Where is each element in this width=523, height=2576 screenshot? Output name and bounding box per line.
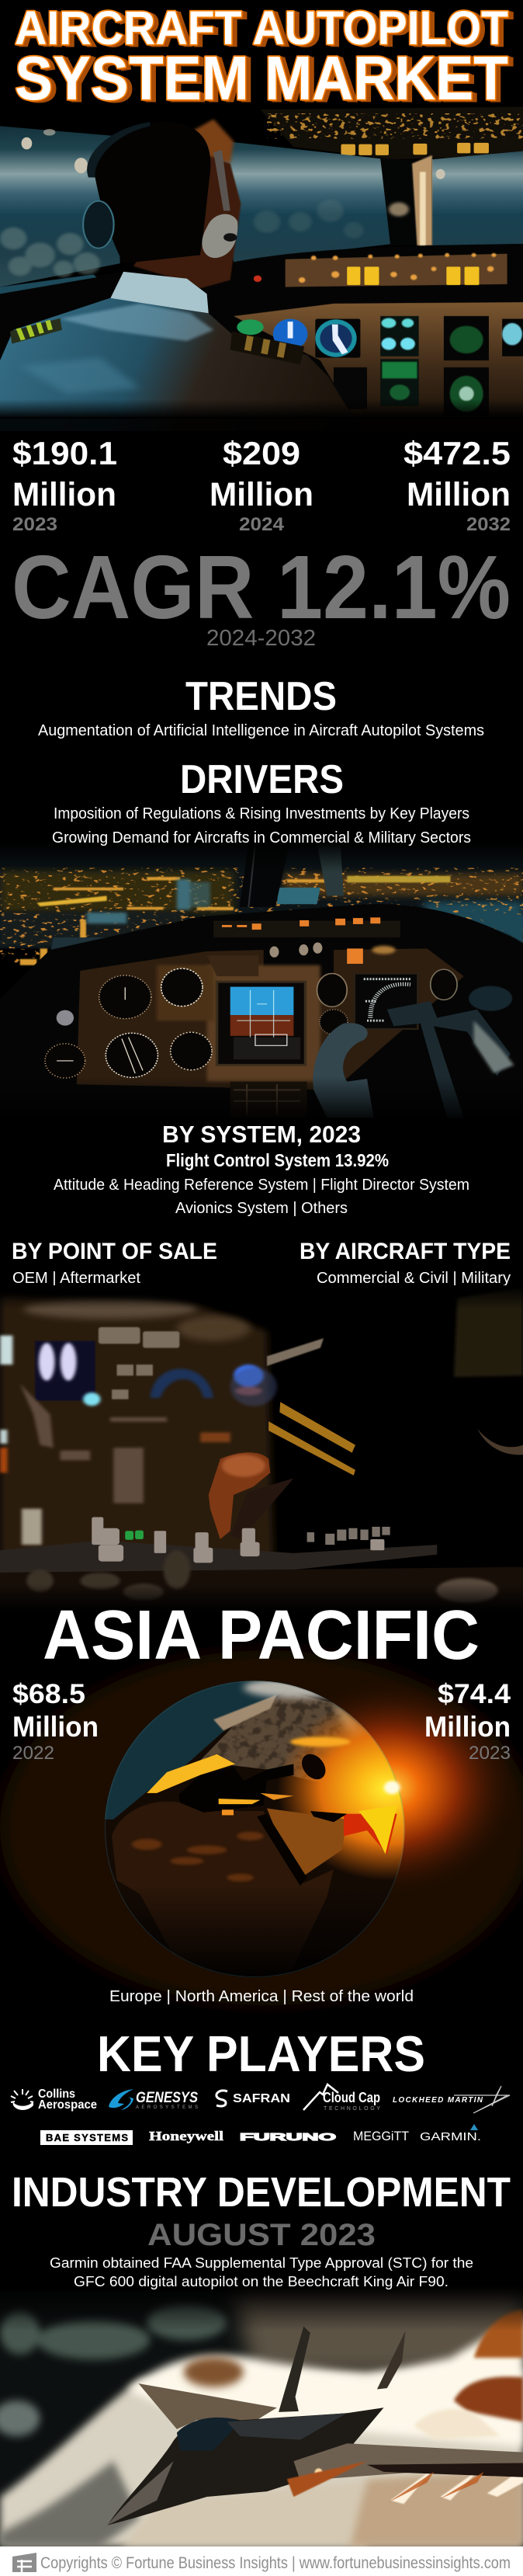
logo: Cloud Cap Technology <box>303 2084 380 2112</box>
windshield <box>0 126 523 287</box>
bottom control panel with knobs <box>0 1517 523 1611</box>
globe with glow <box>0 1650 523 2005</box>
stat: 2024 market size <box>210 435 313 535</box>
blurred cockpit background <box>0 1291 523 1552</box>
sunlight on the limb <box>279 1709 405 1879</box>
stat: 2022 regional size <box>12 1679 99 1764</box>
stat: 2032 market size: 2032 <box>466 514 511 535</box>
Europe and Mediterranean <box>147 1751 347 1886</box>
development text: Garmin obtained FAA Supplemental Type Approval (STC) for the <box>50 2255 473 2271</box>
trends heading: TRENDS <box>185 674 337 719</box>
leading segment: Flight Control System 13.92% <box>166 1150 389 1170</box>
ocean and landmass <box>100 1677 397 1820</box>
control yokes <box>230 986 514 1118</box>
by system section <box>54 1121 469 1217</box>
logo: Genesys Aerosystems: AEROSYSTEMS <box>136 2105 198 2110</box>
drivers text <box>52 805 471 846</box>
logo: Safran: SAFRAN <box>233 2092 290 2105</box>
photo: fighter jet <box>0 2285 523 2546</box>
development text <box>50 2255 473 2289</box>
stat: 2023 market size: Million <box>12 476 116 513</box>
photo: pilot in cockpit <box>0 106 523 435</box>
footer bar <box>0 2546 523 2576</box>
central flight display <box>217 982 305 1065</box>
logo: Genesys Aerosystems: GENESYS <box>136 2090 198 2106</box>
overhead panel <box>260 106 523 159</box>
logo: Garmin <box>420 2124 481 2143</box>
stat: 2023 regional size <box>424 1679 511 1764</box>
stat: 2032 market size: Million <box>407 476 511 513</box>
development text: GFC 600 digital autopilot on the Beechcraft King Air F90. <box>74 2274 449 2289</box>
stat: 2024 market size: $209 <box>223 435 300 471</box>
stat: 2023 regional size: 2023 <box>469 1743 511 1764</box>
logo: BAE Systems: BAE SYSTEMS <box>46 2132 128 2143</box>
CAGR period: 2024-2032 <box>206 626 316 651</box>
stat: 2022 regional size: Million <box>12 1711 99 1743</box>
jet airframe <box>107 2327 523 2526</box>
analog gauges <box>45 968 457 1078</box>
other segments <box>54 1177 469 1217</box>
by aircraft type <box>300 1239 511 1287</box>
afterburner streaks <box>287 2461 523 2504</box>
stat: 2032 market size <box>404 435 511 535</box>
windshield pillar <box>240 857 286 907</box>
stat: 2024 market size: Million <box>210 476 313 513</box>
dashboard <box>33 904 523 1090</box>
logo: Lockheed Martin: LOCKHEED MARTIN <box>393 2096 483 2105</box>
drivers heading: DRIVERS <box>180 757 344 802</box>
city lights <box>0 843 523 965</box>
other regions: Europe | North America | Rest of the world <box>109 1988 414 2005</box>
logo: Garmin: GARMIN. <box>420 2130 481 2143</box>
photo: night cockpit instrument panel <box>0 842 523 1132</box>
stat: 2023 regional size: Million <box>424 1711 511 1743</box>
icon: Fortune Business Insights mark <box>12 2553 36 2572</box>
logo: Collins Aerospace <box>11 2088 97 2112</box>
earth sphere <box>105 1681 405 1977</box>
Africa and Arabia <box>112 1802 397 1948</box>
development date: AUGUST 2023 <box>147 2218 376 2252</box>
by aircraft type: Commercial & Civil | Military <box>317 1270 511 1287</box>
stat: 2023 market size <box>12 435 117 535</box>
glareshield and instrument panels <box>0 244 523 413</box>
logo: Meggitt: MEGGiTT <box>353 2129 409 2143</box>
secondary display <box>355 974 417 1029</box>
sky and smoke <box>0 2290 523 2546</box>
stat: 2022 regional size: 2022 <box>12 1743 54 1764</box>
logo: Collins Aerospace: Aerospace <box>38 2098 97 2112</box>
region heading: ASIA PACIFIC <box>43 1597 480 1674</box>
by point of sale <box>12 1239 217 1287</box>
logo: Collins Aerospace: Collins <box>38 2088 75 2101</box>
stat: 2024 market size: 2024 <box>239 514 285 535</box>
by system heading: BY SYSTEM, 2023 <box>162 1121 361 1148</box>
other segments: Attitude & Heading Reference System | Flight Director System <box>54 1177 469 1194</box>
logo: Lockheed Martin <box>393 2086 510 2113</box>
logo: Safran <box>216 2091 290 2106</box>
logo: Cloud Cap Technology: Cloud Cap <box>323 2090 380 2105</box>
key players heading: KEY PLAYERS <box>97 2025 425 2082</box>
logo: Genesys Aerosystems <box>109 2089 198 2110</box>
stat: 2032 market size: $472.5 <box>404 435 511 471</box>
trends text: Augmentation of Artificial Intelligence in Aircraft Autopilot Systems <box>38 722 484 739</box>
drivers text: Imposition of Regulations & Rising Investments by Key Players <box>54 805 469 822</box>
by point of sale: BY POINT OF SALE <box>12 1239 217 1264</box>
by point of sale: OEM | Aftermarket <box>12 1270 140 1287</box>
other segments: Avionics System | Others <box>175 1200 348 1217</box>
stat: 2023 regional size: $74.4 <box>438 1679 511 1709</box>
ambient glow <box>0 1650 523 2005</box>
title <box>15 2 513 114</box>
stat: 2022 regional size: $68.5 <box>12 1679 85 1709</box>
hand and gold sleeve stripes <box>209 1402 355 1539</box>
logos <box>11 2084 510 2145</box>
stat: 2023 market size: $190.1 <box>12 435 117 471</box>
logo: Honeywell: Honeywell <box>149 2129 223 2143</box>
stat: 2023 market size: 2023 <box>12 514 57 535</box>
by aircraft type: BY AIRCRAFT TYPE <box>300 1239 511 1264</box>
logo: Furuno: FURUNO <box>240 2131 336 2143</box>
pilot figure <box>0 120 523 435</box>
logo: Cloud Cap Technology: TECHNOLOGY <box>324 2106 380 2112</box>
photo: hand on cockpit controls <box>0 1285 523 1611</box>
drivers text: Growing Demand for Aircrafts in Commercial & Military Sectors <box>52 829 471 846</box>
